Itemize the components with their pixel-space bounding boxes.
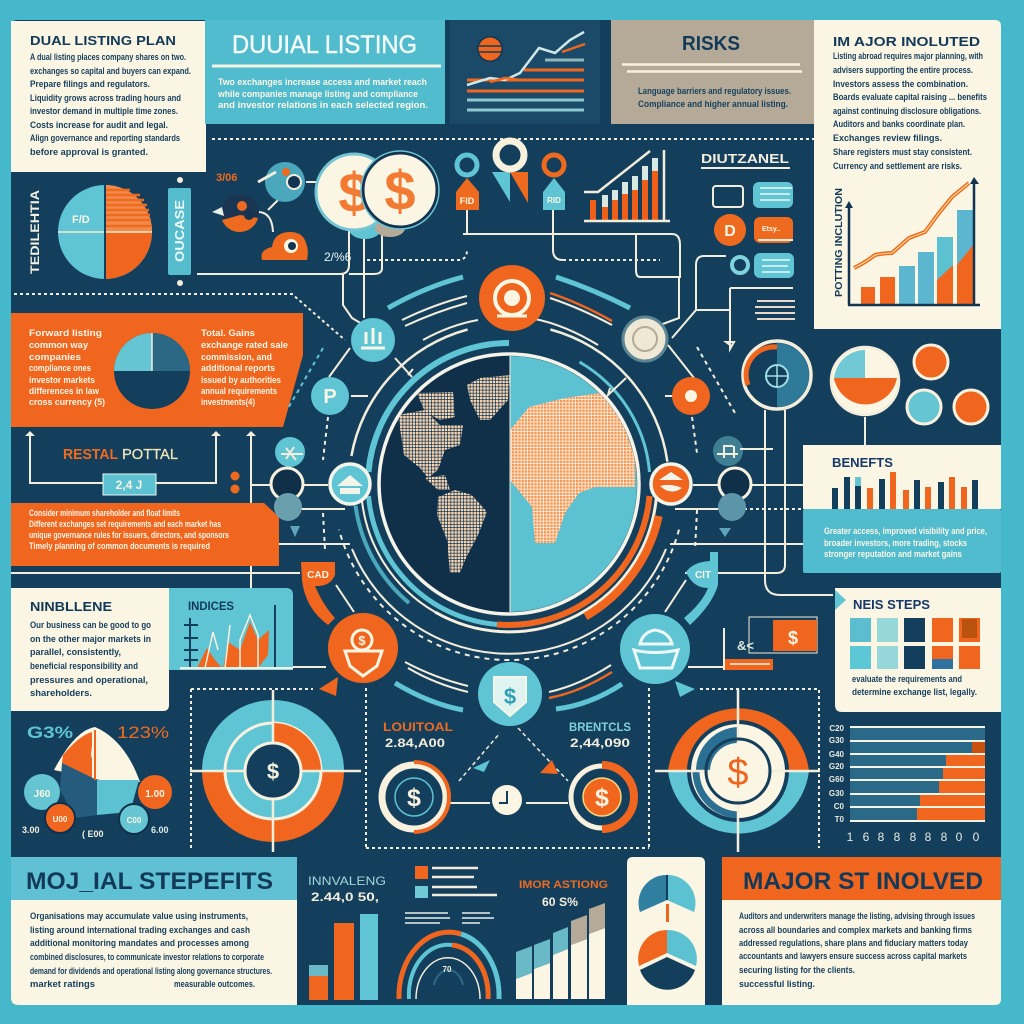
heading: mojial stepefits: MOJ_IAL STEPEFITS [26,868,273,895]
label: major action value: IMOR ASTIONG [519,879,608,891]
body text: stepefits: listing around international trading exchanges and cash [30,925,250,936]
icon: striped ball [477,36,503,62]
body text: nimble: Our business can be good to go [30,620,151,631]
panel: next steps [835,588,1001,712]
body text: major: advisers supporting the entire process. [833,65,973,76]
body text: stepefits: measurable outcomes. [174,979,255,990]
arrow: into next steps [835,590,846,610]
small dollar chart: $ [788,628,798,648]
body text: orange band: Different exchanges set requirements and each market has [29,519,221,530]
panel: left orange pie [11,313,303,427]
heading: list: DIUTZANEL [701,151,789,166]
body text: risks: Language barriers and regulatory issues. [638,86,791,97]
body text: nimble [30,620,151,699]
target chart right: $ [727,752,749,794]
icon: white location pin [492,141,528,203]
body text: orange right: issued by authorities [201,375,281,386]
dome pie chart: J60 [34,789,51,800]
y axis labels: G30 [829,789,845,798]
node: orange badge right [651,464,691,504]
icon: teal pin with orange tag: FID [460,196,475,206]
x axis labels: 0 [973,830,980,844]
body text: intro: Two exchanges increase access and market reach [218,77,427,88]
globe [379,354,639,614]
body text: orange right: commission, and [201,352,272,363]
node: big orange badge [328,613,398,683]
coin right [571,765,634,829]
body text: nimble: on the other major markets in [30,634,151,645]
panel: dual listing plan [11,21,206,172]
dome pie chart [22,723,172,839]
coin left: $ [407,784,421,812]
label: benefits value: BRENTCLS [569,720,631,734]
connectors between coins [448,728,568,803]
node: orange tag [301,562,335,625]
node: center shield badge: $ [504,684,516,709]
rising bars [516,903,605,999]
body text: benefits: stronger reputation and market gains [824,549,962,560]
target chart left: $ [267,759,279,784]
target chart left [190,690,361,852]
heading: indices: INDICES [188,599,234,613]
body text: stepefits: Organisations may accumulate value using instruments, [30,911,248,922]
small dollar chart: &< [737,638,754,653]
node: faded teal marker left [274,493,302,537]
colour grid [850,618,980,669]
y axis labels: G30 [829,736,845,745]
body text: stepefits: demand for dividends and operational listing along governance structures. [30,966,272,977]
x axis labels: 8 [925,830,932,844]
node: top orange [479,265,545,331]
vertical teal tag: OUCASE [172,200,187,262]
icon: coin stack [316,151,439,239]
node: small dark teal [713,436,743,466]
body text: orange right: annual requirements [201,386,277,397]
x axis labels: 8 [941,830,948,844]
body text: orange left: Forward listing [29,328,102,339]
map: eurasia and africa [510,393,635,543]
shape: lower split [638,930,697,990]
node: teal tag [684,552,718,625]
y axis labels: C0 [834,802,845,811]
icon: coin stack: $ [384,159,416,222]
body text: intro [217,77,428,111]
x axis labels: 6 [863,830,870,844]
pie label: F/D [72,214,90,226]
body text: involved: across all boundaries and complex markets and banking firms [739,925,972,936]
labels: percentages: G3% [27,723,73,742]
small dollar chart [724,617,817,670]
panel: orange text band [11,503,279,566]
heading: list [701,151,790,169]
marker: orange wedge [319,677,338,696]
panel: indices chart [169,588,293,670]
marker: teal wedge [675,681,695,697]
body text: orange band: unique governance rules for issuers, directors, and sponsors [29,530,229,541]
body text: plan: Liquidity grows across trading hours and [30,93,181,104]
body text: stepefits: market ratings [30,979,95,990]
icon: teal pin with orange tag [456,155,479,210]
body text: plan: A dual listing places company shares on two. [30,52,186,63]
body text: involved: successful listing. [739,979,815,990]
y axis labels: G40 [829,750,845,759]
node: P [311,377,349,415]
dome pie chart: 1.00 [145,789,165,800]
shape: upper split [639,875,695,912]
icon: orange pin with teal tag: RID [547,196,561,205]
dots [230,472,240,494]
body text: involved [739,911,975,990]
body text: benefits [824,526,987,560]
body text: stepefits: additional monitoring mandates and processes among [30,938,249,949]
body text: plan: investor demand in multiple time zones. [30,106,178,117]
small ticks and dashed arcs [323,345,735,550]
node: orange target [672,377,710,415]
connector arrow [726,342,734,349]
shape: orange tick [666,904,669,922]
stacked bar chart [829,724,985,844]
vertical teal tag [168,177,191,286]
node: big orange badge: $ [358,633,366,648]
body text: orange band: Timely planning of common documents is required [29,541,210,552]
body text: next steps: evaluate the requirements and [852,674,962,685]
heading: rental portal [63,446,178,463]
panel: mojial stepefits [11,857,297,1005]
label: percentage: 2/%6 [324,250,352,264]
body text: involved: addressed regulations, share plans and fiduciary matters today [739,938,969,949]
icon: node one [258,162,305,202]
arc accents [388,277,630,710]
label: investing value [308,874,386,904]
body text: nimble: parallel, consistently, [30,647,121,658]
y axis labels [829,724,845,824]
dome pie chart: U00 [53,815,68,824]
dashed frames [191,688,819,848]
heading: next steps: NEIS STEPS [853,597,930,612]
label: investing value: INNVALENG [308,874,386,888]
rings around globe [339,330,679,660]
body text: orange right: Total. Gains [201,328,255,339]
body text: orange band: Consider minimum shareholder and float limits [29,508,180,519]
panel: top trend chart [445,20,611,124]
node: small teal [275,437,305,467]
heading: risks: RISKS [682,33,740,55]
body text: orange left: compliance ones [29,363,91,374]
node: house badge [330,464,370,504]
node: white ring left [271,468,303,500]
label: major action value [519,879,608,909]
body text: plan: Prepare filings and regulators. [30,79,150,90]
body text: benefits: broader investors, more trading, stocks [824,538,967,549]
body text: major: Share registers must stay consistent. [833,147,972,158]
panel: tall cream with shield shapes [627,857,705,1005]
body text: stepefits [30,911,272,990]
body text: orange left [29,328,105,408]
x axis labels: 8 [894,830,901,844]
x axis labels: 8 [910,830,917,844]
pie chart: left [58,185,152,279]
connector lines: top [197,182,793,345]
body text: intro: while companies manage listing and compliance [217,89,418,100]
body text: orange left: companies [29,352,81,363]
ring gauge right [743,341,811,409]
heading: rental portal: RESTAL [63,446,118,463]
body text: involved: securing listing for the clients. [739,965,855,976]
panel: risks [611,20,814,124]
body text: major: against continuing disclosure obligations. [833,106,981,117]
body text: plan: before approval is granted. [30,147,148,158]
body text: orange left: cross currency (5) [29,397,105,408]
body text: major: Auditors and banks coordinate plan. [833,119,965,130]
node: teal icon [351,318,395,362]
label: investing value: 2.44,0 50, [311,890,379,904]
body text: next steps: determine exchange list, legally. [852,687,977,698]
node: beige seal [623,317,667,361]
icon: orange pin with teal tag [543,155,565,210]
body text: major: Currency and settlement are risks. [833,161,962,172]
dashed accent near orange panel [287,348,323,410]
vertical connector [11,435,350,662]
body text: orange right: exchange rated sale [201,340,288,351]
panel: benefits [803,445,1001,573]
vertical label: TEDILEHTIA [28,190,42,274]
node: white ring right [719,468,751,500]
label: total value [383,720,453,750]
node: P: P [323,386,337,408]
bar chart: benefits [832,472,978,509]
x axis labels: 1 [847,830,854,844]
list icons: Etsy.. [762,226,780,233]
heading: dual listing plan: DUAL LISTING PLAN [30,33,176,48]
bar chart: bottom [309,914,378,1000]
heading: dual listing: DUUIAL LISTING [232,31,417,59]
label: total value: 2.84,A00 [385,736,445,750]
body text: orange left: common way [29,340,89,351]
heading: major st involved: MAJOR ST INOLVED [743,868,983,895]
pie chart: right [831,347,899,415]
body text: orange left: differences in law [29,386,100,397]
dome pie chart: 123% [117,723,169,742]
panel: dual listing title [205,20,445,124]
circles: legend [907,345,988,424]
body text: stepefits: combined disclosures, to communicate investor relations to corporate [30,952,264,963]
node: faded teal marker right [718,493,746,537]
label: total value: LOUITOAL [383,720,453,734]
body text: intro: and investor relations in each selected region. [218,100,428,111]
x axis labels: 0 [956,830,963,844]
list icons [713,182,795,319]
icon: node two [212,194,259,232]
gauge chart: 70 [443,965,452,974]
icon: cloud [261,232,308,260]
body text: plan: exchanges so capital and buyers can expand. [30,66,191,77]
x axis labels [847,830,980,844]
body text: risks: Compliance and higher annual listing. [638,99,788,110]
label: major action value: 60 S% [542,895,578,909]
body text: nimble: shareholders. [30,688,92,699]
dome pie chart: 3.00 [22,825,40,835]
bracket connector with value: 2,4 J [116,478,142,492]
body text: orange right: investments(4) [201,397,255,408]
clock [492,785,522,815]
panel: nimble text [11,588,169,711]
pie chart: orange panel [114,333,190,409]
heading: major involved: IM AJOR INOLUTED [833,34,980,49]
dome pie chart: ( E00 [82,829,104,839]
y axis labels: T0 [835,815,845,824]
body text: orange right: additional reports [201,363,275,374]
body text: next steps [852,674,977,698]
body text: involved: accountants and lawyers ensure success across capital markets [739,951,967,962]
decorative dotted rules [14,139,814,340]
gauge chart [399,932,499,999]
panel: major involved [814,20,1001,329]
body text: benefits: Greater access, improved visibility and price, [824,526,987,537]
small bar chart [584,150,670,221]
dome pie chart: C00 [127,816,142,825]
target chart right [655,689,820,852]
node: orange tag: CAD [307,570,329,581]
dome pie chart: 6.00 [151,825,169,835]
panel: major involved bottom [722,857,1001,1005]
chart stripes [467,60,584,110]
body text: orange left: investor markets [29,375,95,386]
label: benefits value: 2,44,090 [570,736,630,750]
y axis labels: C20 [829,724,845,733]
axis label: POTTING INCLUTION [834,188,845,297]
node: teal tag: CIT [695,570,711,581]
label: benefits value [569,720,631,750]
body text: orange band [29,508,229,552]
icon: coin stack: $ [338,161,370,224]
body text: plan: Costs increase for audit and legal. [30,120,168,131]
body text: plan [30,52,191,158]
trend lines [467,32,585,85]
label: small percentage: 3/06 [216,172,237,184]
body text: major [833,51,987,172]
coin left [382,762,449,832]
bracket connector with value [25,431,221,495]
coin right: $ [595,784,609,812]
x axis labels: 8 [878,830,885,844]
body text: nimble: beneficial responsibility and [30,661,138,672]
heading: benefits: BENEFTS [832,456,893,470]
heading: nimble: NINBLLENE [30,600,112,614]
body text: plan: Align governance and reporting standards [30,133,180,144]
y axis labels: G20 [829,762,845,771]
body text: major: Exchanges review filings. [833,133,942,144]
body text: nimble: pressures and operational, [30,675,148,686]
bar and line chart: growth [834,177,980,305]
body text: major: Investors assess the combination. [833,79,968,90]
y axis labels: G60 [829,775,845,784]
node: center shield badge [478,662,542,726]
body text: orange right [201,328,288,408]
legend [405,866,497,923]
list icons: D [724,223,736,240]
heading: rental portal: POTTAL [122,446,178,463]
body text: risks [638,86,791,110]
body text: major: Boards evaluate capital raising ... benefits [833,92,987,103]
node: big teal ship [620,614,690,684]
map: americas [398,375,635,573]
